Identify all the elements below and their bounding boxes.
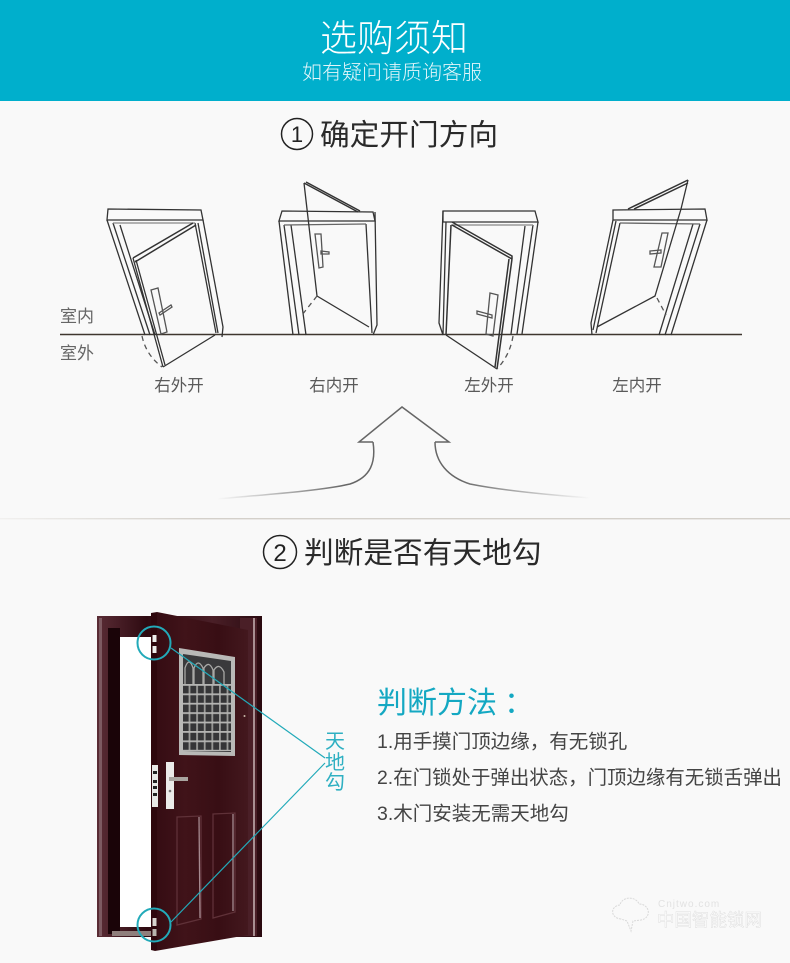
step 1: 1.用手摸门顶边缘，有无锁孔	[377, 731, 627, 753]
door diagram: left inward	[591, 180, 707, 335]
door diagram: right inward	[279, 182, 377, 335]
callout label: top and bottom hooks	[325, 731, 345, 794]
method heading: 判断方法：	[377, 687, 534, 720]
header banner	[0, 0, 790, 101]
arrow: upward pointing to next step	[217, 407, 590, 499]
door opening	[120, 637, 152, 927]
label: outdoor: 室外	[60, 344, 94, 363]
callout label: top and bottom hooks: 勾	[325, 771, 345, 794]
header title: 选购须知	[320, 18, 468, 59]
door type labels: 右外开	[154, 376, 204, 395]
bottom hook hardware	[152, 918, 156, 936]
lower panels	[177, 813, 235, 925]
ground line	[60, 334, 742, 336]
watermark	[613, 898, 762, 931]
method list	[377, 731, 782, 825]
door diagram: right outward	[107, 209, 223, 367]
door photo	[97, 612, 262, 951]
door type labels: 左内开	[612, 376, 662, 395]
divider	[0, 518, 790, 519]
heading 1: determine door direction: 确定开门方向	[320, 119, 498, 152]
door type labels	[154, 376, 662, 395]
door frame	[97, 616, 262, 937]
door type labels: 左外开	[464, 376, 514, 395]
callout label: top and bottom hooks: 地	[325, 751, 345, 774]
lock edge plate	[152, 765, 158, 807]
label: indoor: 室内	[60, 307, 94, 326]
peephole	[244, 715, 246, 717]
top hook hardware	[152, 635, 156, 653]
watermark url: Cnjtwo.com	[658, 899, 720, 910]
watermark name: 中国智能锁网	[657, 910, 762, 930]
callout circles and leader lines	[138, 626, 325, 942]
door handle	[166, 762, 188, 809]
callout label: top and bottom hooks: 天	[325, 731, 345, 753]
step 3: 3.木门安装无需天地勾	[377, 803, 569, 825]
door leaf	[151, 612, 248, 951]
heading 2: check for top and bottom hooks: 判断是否有天地勾	[304, 537, 542, 570]
step 2: 2.在门锁处于弹出状态，门顶边缘有无锁舌弹出	[377, 767, 782, 789]
heading 2: check for top and bottom hooks: 2	[273, 540, 287, 567]
door diagram: left outward	[439, 211, 538, 369]
window grille	[179, 648, 235, 756]
heading 1: determine door direction: 1	[291, 122, 303, 147]
header subtitle: 如有疑问请质询客服	[302, 61, 482, 84]
door type labels: 右内开	[309, 376, 359, 395]
watermark icon: cloud	[613, 898, 648, 931]
